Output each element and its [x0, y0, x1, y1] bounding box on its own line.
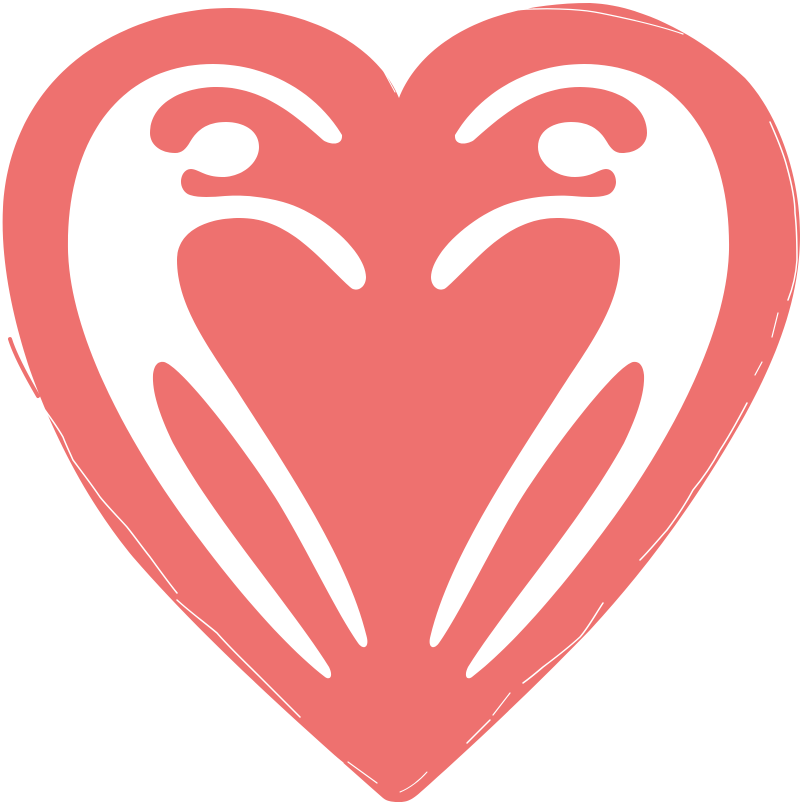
right bird cutout [430, 64, 729, 678]
left brush strip [10, 339, 38, 396]
left bird cutout [68, 64, 367, 678]
